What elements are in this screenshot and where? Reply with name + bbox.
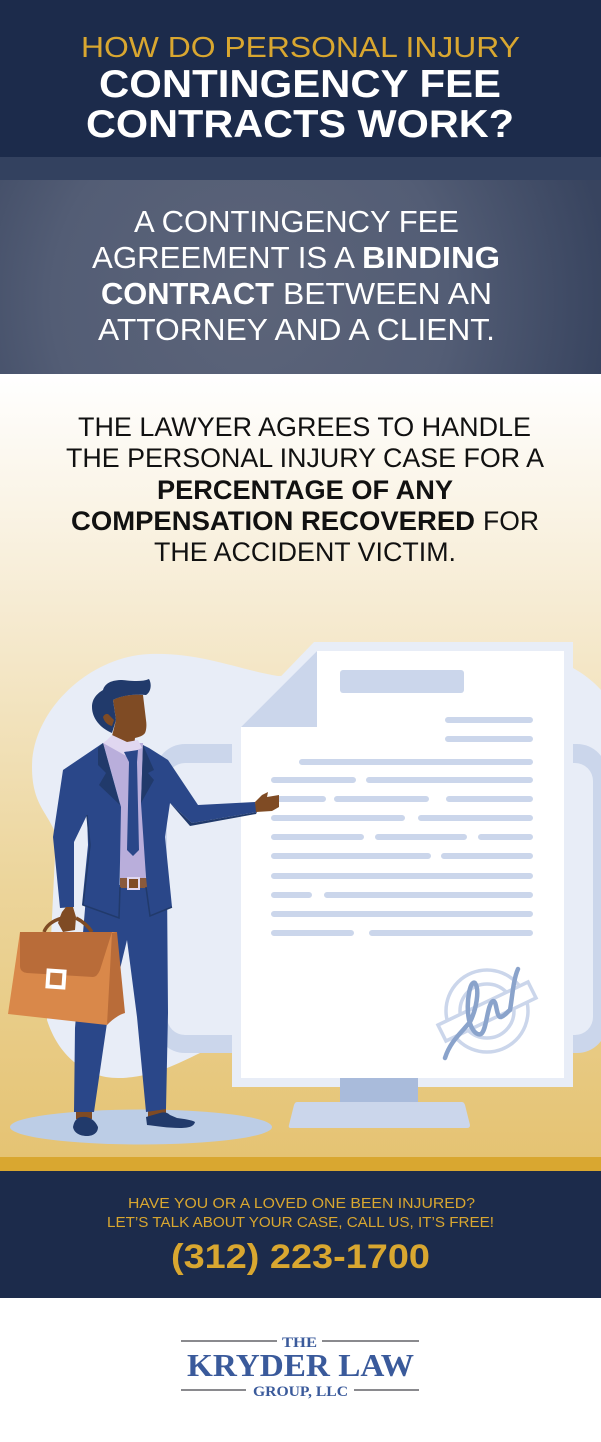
neck and face xyxy=(112,695,146,746)
panel: definition xyxy=(0,180,601,374)
title line 3: CONTRACTS WORK? xyxy=(86,103,514,146)
definition text: BETWEEN AN xyxy=(283,276,492,311)
logo xyxy=(181,1335,419,1400)
explanation text: PERCENTAGE OF ANY xyxy=(157,475,453,505)
call to action text: HAVE YOU OR A LOVED ONE BEEN INJURED? xyxy=(128,1195,475,1212)
explanation text: FOR xyxy=(483,506,539,536)
document xyxy=(232,642,573,1087)
hand: holding xyxy=(58,907,76,932)
shoes xyxy=(73,1112,195,1136)
document heading bar xyxy=(340,670,464,693)
briefcase clasp xyxy=(47,970,65,988)
shirt xyxy=(103,743,146,880)
monitor stand xyxy=(289,1078,470,1128)
explanation text: THE LAWYER AGREES TO HANDLE xyxy=(78,412,531,442)
ground shadow xyxy=(10,1110,272,1144)
collar xyxy=(103,735,142,757)
hair xyxy=(92,679,151,733)
gold band xyxy=(0,1157,601,1171)
hand: pointing xyxy=(255,792,279,812)
explanation text: THE ACCIDENT VICTIM. xyxy=(154,537,456,567)
divider band xyxy=(0,157,601,180)
call to action text line 2: LET’S TALK ABOUT YOUR CASE, CALL US, IT’S FREE! xyxy=(107,1214,494,1231)
tie xyxy=(124,750,139,856)
panel: call to action xyxy=(0,1171,601,1298)
phone number: (312) 223-1700 xyxy=(171,1238,430,1276)
definition text: ATTORNEY AND A CLIENT. xyxy=(98,312,495,347)
definition text: AGREEMENT IS A xyxy=(92,240,355,275)
ear xyxy=(103,714,114,726)
explanation text: COMPENSATION RECOVERED xyxy=(71,506,475,536)
title line 1: HOW DO PERSONAL INJURY xyxy=(81,32,520,64)
lawyer figure xyxy=(8,679,279,1136)
jacket xyxy=(53,743,257,918)
panel: title xyxy=(0,0,601,157)
briefcase handle xyxy=(44,918,92,932)
belt xyxy=(120,878,147,889)
definition text: BINDING xyxy=(362,240,500,275)
title line 2: CONTINGENCY FEE xyxy=(99,63,501,106)
seal and signature xyxy=(438,969,536,1058)
trousers xyxy=(74,885,168,1112)
explanation text: THE PERSONAL INJURY CASE FOR A xyxy=(66,443,544,473)
panel: explanation and illustration xyxy=(0,374,601,1157)
document fold xyxy=(241,651,317,727)
document text lines xyxy=(274,720,530,933)
definition text: A CONTINGENCY FEE xyxy=(134,204,459,239)
logo: group llc: GROUP, LLC xyxy=(253,1384,348,1400)
logo: kryder law: KRYDER LAW xyxy=(187,1347,414,1383)
background blob xyxy=(32,654,601,1078)
explanation text xyxy=(66,412,544,567)
logo: the: THE xyxy=(282,1335,317,1351)
briefcase xyxy=(8,907,125,1025)
monitor screen xyxy=(155,744,601,1053)
definition text xyxy=(92,204,500,347)
briefcase flap xyxy=(20,932,112,977)
socks xyxy=(76,1108,166,1119)
definition text: CONTRACT xyxy=(101,276,274,311)
